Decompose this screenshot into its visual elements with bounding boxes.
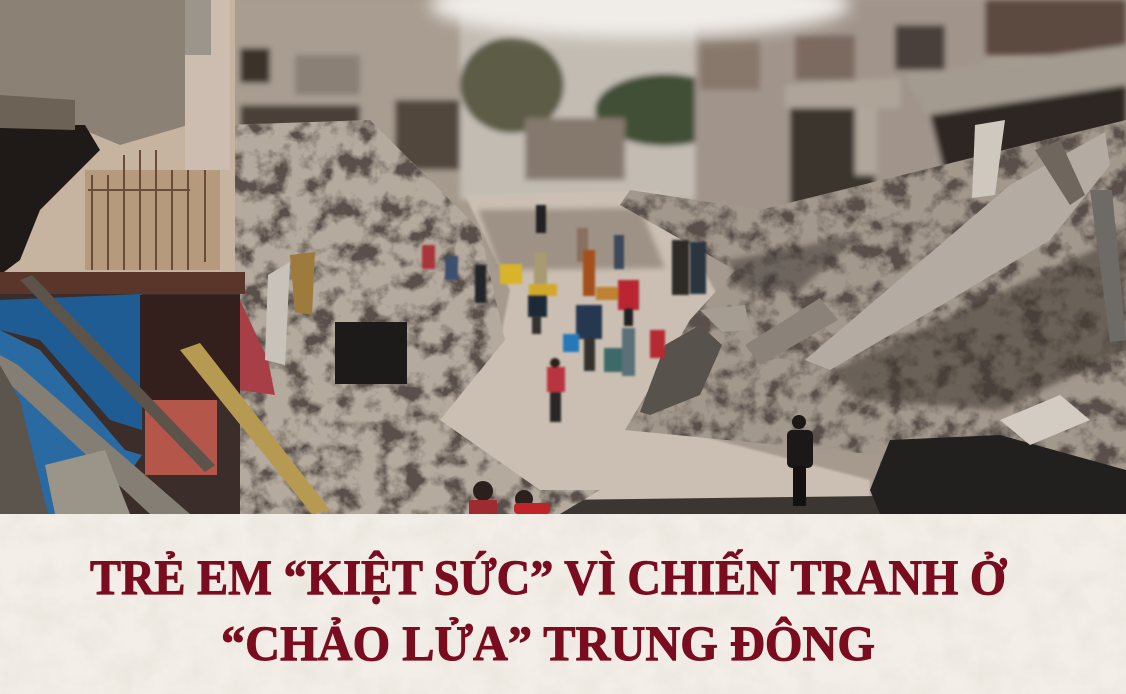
paper title panel: [0, 514, 1126, 694]
background buildings: [230, 0, 1126, 225]
dark cloth: [335, 322, 407, 384]
title line 1: TRẺ EM “KIỆT SỨC” VÌ CHIẾN TRANH Ở: [90, 548, 1007, 605]
icon: foreground child: [787, 415, 813, 506]
photo: destroyed street with children: [0, 0, 1126, 514]
left building: [0, 0, 235, 275]
debris beams: [180, 343, 330, 514]
title line 2: “CHẢO LỬA” TRUNG ĐÔNG: [221, 615, 875, 671]
balcony railing: [88, 150, 205, 270]
group of small figures: [422, 205, 706, 422]
collapsed slab: [805, 132, 1110, 370]
left rubble: [140, 120, 600, 514]
blue container: [0, 294, 142, 430]
top haze: [430, 0, 850, 37]
foreground heads: [469, 481, 550, 514]
right rubble: [620, 120, 1126, 514]
shaded rubble under slab: [830, 235, 1126, 410]
street: [430, 190, 870, 514]
